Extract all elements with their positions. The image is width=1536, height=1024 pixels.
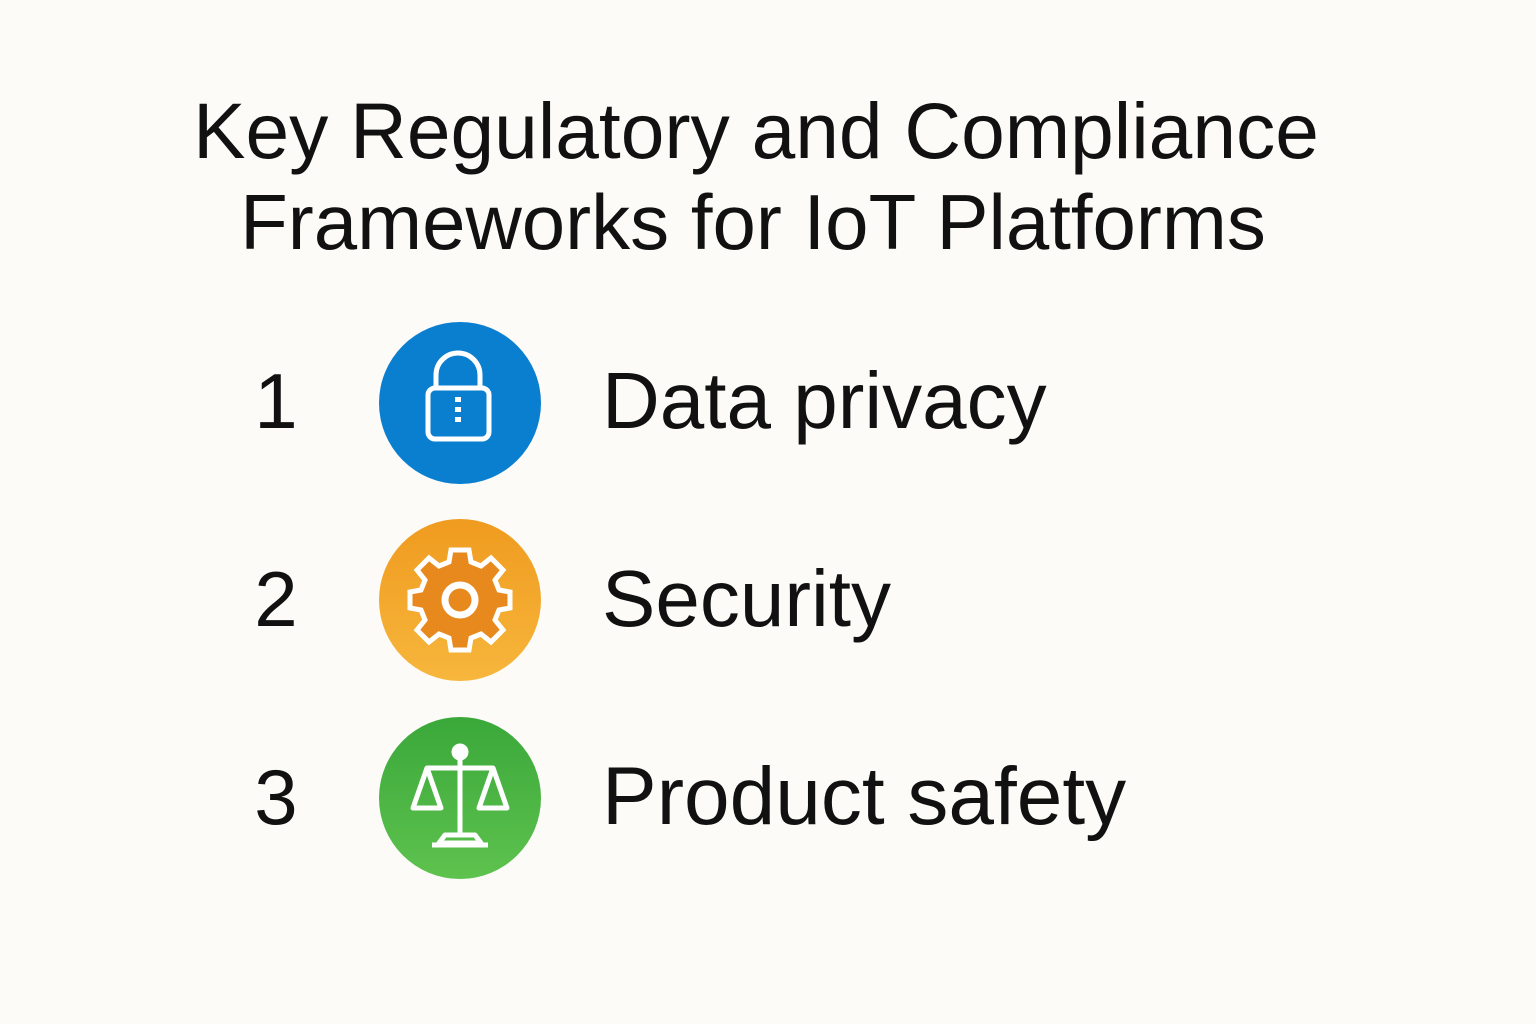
icon: lock	[379, 322, 541, 484]
item 3: product safety	[254, 717, 1126, 879]
label: Product safety	[602, 751, 1126, 842]
title: Frameworks for IoT Platforms	[240, 178, 1266, 266]
item 1: data privacy	[254, 322, 1047, 484]
title	[193, 87, 1319, 266]
number 3: 3	[254, 753, 298, 841]
label: Data privacy	[602, 356, 1047, 445]
title: Key Regulatory and Compliance	[193, 87, 1319, 175]
number 1: 1	[254, 357, 298, 445]
label: Security	[602, 554, 891, 643]
number 2: 2	[254, 555, 298, 643]
icon: gear	[379, 519, 541, 681]
item 2: security	[254, 519, 891, 681]
icon: scales	[379, 717, 541, 879]
